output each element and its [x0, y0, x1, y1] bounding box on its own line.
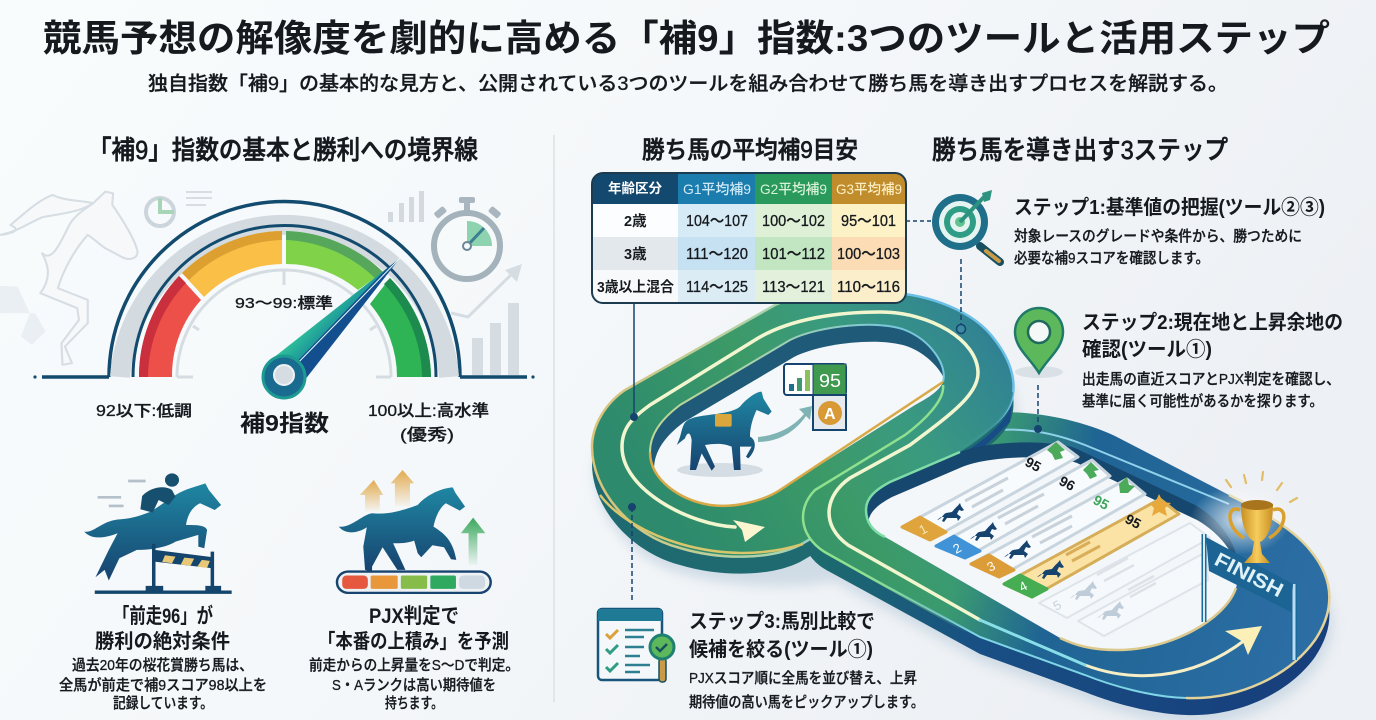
connector: step 3 to track: [628, 503, 636, 600]
track: S-curve band: [803, 382, 1013, 642]
table row: 3 years: 100〜103: [837, 246, 900, 263]
table row: 3 years and older: [597, 279, 900, 296]
heading: previous race 96: 「前走96」が: [113, 604, 213, 628]
heading: absolute condition: 勝利の絶対条件: [95, 630, 230, 653]
step 3: [598, 609, 924, 711]
row 4: 95: [1123, 511, 1144, 532]
table header: [608, 180, 902, 197]
table row: 2 years: 95〜101: [841, 213, 896, 230]
block: PJX rating: [309, 470, 519, 712]
faded rows: [1039, 523, 1210, 636]
icon: small bars: [388, 191, 424, 222]
score card: [784, 364, 846, 430]
row 3: 3: [984, 558, 998, 575]
table header: 年齢区分: [608, 180, 662, 196]
table row: 3 years and older: 114〜125: [686, 279, 748, 296]
icon: jumping horse and jockey: [84, 473, 232, 592]
icon: checklist with magnifier: [598, 609, 674, 682]
row 2: [936, 460, 1110, 558]
step 2: 確認(ツール①): [1082, 338, 1212, 361]
step 2 body: 出走馬の直近スコアとPJX判定を確認し、: [1082, 371, 1340, 388]
watermark horse: [0, 192, 138, 365]
track shadow: [595, 317, 1332, 720]
table row: 3 years: 3歳: [624, 246, 647, 263]
table row: 2 years: 2歳: [624, 213, 647, 230]
icon: location pin: [1015, 308, 1063, 378]
icon: pie chart: [146, 192, 212, 226]
table row: 2 years: 104〜107: [686, 213, 748, 230]
block: jumping horse: 記録しています。: [113, 695, 213, 712]
label: standard: 93〜99:標準: [235, 295, 333, 312]
table row: 3 years: 111〜120: [686, 246, 748, 263]
gauge yellow zone: [182, 231, 282, 297]
table header: G1平均補9: [683, 181, 751, 197]
panel: winning path track: [592, 221, 1332, 720]
block: jumping horse: [59, 473, 267, 712]
panel: gauge basics: [0, 135, 535, 712]
gauge hub: [263, 356, 305, 398]
step 1 body: 対象レースのグレードや条件から、勝つために: [1014, 227, 1302, 245]
heading: gauge basics: 「補9」指数の基本と勝利への境界線: [88, 135, 478, 165]
finish banner: [1204, 534, 1294, 660]
heading: PJX: PJX判定で: [369, 605, 459, 628]
score card: A: [824, 406, 836, 423]
step 3: 期待値の高い馬をピックアップします。: [689, 694, 924, 711]
connector: table to track: [630, 303, 638, 421]
table header: G2平均補9: [760, 181, 827, 197]
glow near finish: [1190, 485, 1290, 555]
table row: 3 years: [624, 246, 900, 263]
table row: 2 years: [624, 213, 896, 230]
table row: 3 years: 101〜112: [762, 246, 825, 263]
track: upper loop: [592, 291, 1014, 574]
block: PJX rating: 持ちます。: [385, 695, 443, 712]
icon: trophy: [1226, 472, 1297, 563]
gauge dark green zone: [370, 278, 431, 377]
text: PJX detail: 前走からの上昇量をS〜Dで判定。: [309, 657, 519, 674]
label: high: 100以上:高水準: [368, 402, 489, 420]
step 1: [932, 190, 1325, 267]
arrow: final stretch: [1225, 626, 1262, 655]
connector: step 1 to track: [956, 259, 966, 334]
step 3: 候補を絞る(ツール①): [689, 638, 873, 661]
track: lower loop infield: [866, 442, 1241, 665]
gauge needle: [268, 258, 400, 390]
gauge: [33, 202, 535, 444]
step 2 heading: ステップ2:現在地と上昇余地の: [1082, 311, 1343, 334]
step 3 heading: ステップ3:馬別比較で: [689, 610, 875, 633]
label: gauge name: 補9指数: [240, 410, 329, 436]
step 3 body: PJXスコア順に全馬を並び替え、上昇: [689, 669, 917, 687]
step 2: [1015, 308, 1343, 410]
row 1: 95: [1023, 454, 1044, 475]
step 1: 必要な補9スコアを確認します。: [1014, 250, 1209, 267]
step 2: 基準に届く可能性があるかを探ります。: [1082, 392, 1323, 410]
row 4: 4: [1016, 578, 1030, 595]
heading: average guide: 勝ち馬の平均補9目安: [642, 137, 858, 164]
row 3: 95: [1091, 492, 1112, 513]
icon: horse on rating bar: [337, 470, 491, 593]
rising bars and arrow: [451, 264, 522, 375]
label: low: 92以下:低調: [96, 402, 192, 420]
score card: 95: [819, 371, 841, 391]
icon: horse: [677, 392, 772, 471]
row 4: [1004, 494, 1179, 597]
gauge red zone: [139, 276, 201, 377]
block: PJX rating: S・Aランクは高い期待値を: [332, 677, 496, 694]
table: average by grade: [592, 173, 906, 303]
table row: 2 years: 100〜102: [762, 213, 825, 230]
row 1: [902, 442, 1078, 540]
gauge green zone: [286, 231, 383, 290]
horse in upper loop: [677, 364, 846, 477]
table row: 3 years and older: 110〜116: [837, 279, 900, 296]
row 2: 2: [950, 540, 964, 557]
arrow: upper loop direction: [733, 520, 765, 542]
table row: 3 years and older: 113〜121: [762, 279, 825, 296]
icon: target with magnifier: [932, 190, 1000, 262]
row 2: 96: [1057, 473, 1078, 494]
icon: stopwatch: [433, 197, 502, 279]
heading: three steps: 勝ち馬を導き出す3ステップ: [932, 135, 1228, 165]
heading: predict gain: 「本番の上積み」を予測: [318, 630, 509, 653]
track lane lines: [622, 312, 1245, 676]
gauge silver band: [109, 202, 460, 377]
row 3: [971, 477, 1145, 577]
faded rows: 5: [1050, 597, 1064, 614]
connector: table to step 1: [906, 220, 932, 222]
step 1 heading: ステップ1:基準値の把握(ツール②③): [1014, 196, 1325, 219]
connector: step 2 to track: [1034, 385, 1042, 433]
table row: 3 years and older: 3歳以上混合: [597, 279, 674, 296]
row 1: 1: [916, 521, 930, 538]
block: jumping horse: 全馬が前走で補9スコア98以上を: [59, 676, 267, 694]
arrow: horse to score: [758, 406, 812, 442]
subtitle: 独自指数「補9」の基本的な見方と、公開されている3つのツールを組み合わせて勝ち馬を導き出すプロセスを解説する。: [148, 73, 1228, 95]
ranking list on track: [902, 442, 1210, 636]
finish banner: FINISH: [1211, 549, 1287, 602]
text: past winners: 過去20年の桜花賞勝ち馬は、: [72, 657, 253, 674]
table header: G3平均補9: [836, 181, 902, 197]
title: 競馬予想の解像度を劇的に高める「補9」指数:3つのツールと活用ステップ: [43, 18, 1330, 59]
label: excellent: (優秀): [400, 426, 454, 444]
track: lower loop: [803, 412, 1329, 715]
